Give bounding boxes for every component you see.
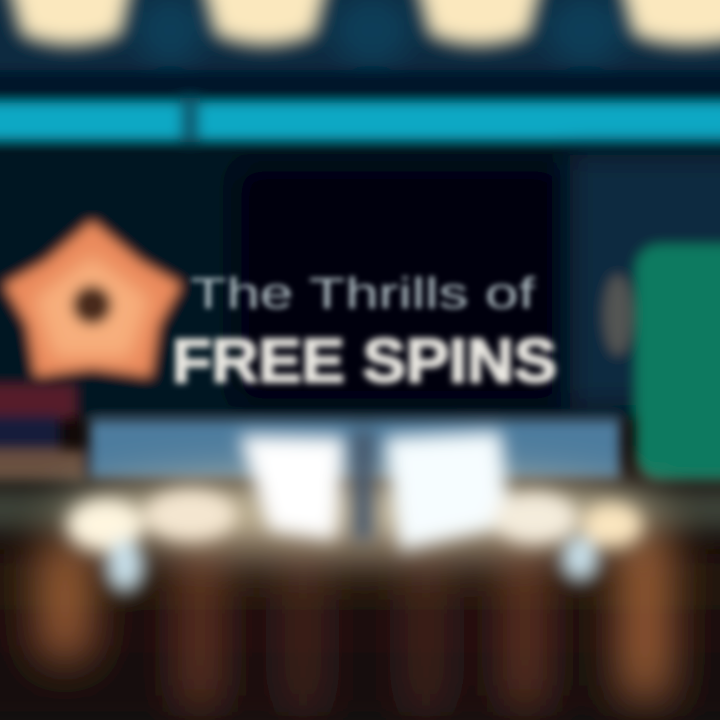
middle wall — [0, 146, 720, 416]
top band — [0, 0, 720, 96]
title text — [172, 269, 557, 396]
icon: orange pentagon badge — [5, 222, 180, 376]
cyan stripe — [0, 96, 720, 144]
green shape — [604, 245, 720, 480]
title text: The Thrills of — [190, 269, 536, 318]
floor light streaks — [40, 530, 670, 715]
white glow lights — [60, 430, 660, 591]
left red object — [0, 385, 85, 480]
title text: FREE SPINS — [172, 327, 557, 396]
floor band — [0, 420, 720, 530]
icon: glowing lights — [6, 0, 720, 44]
center lane divider — [352, 430, 374, 540]
lane floor — [0, 555, 720, 720]
